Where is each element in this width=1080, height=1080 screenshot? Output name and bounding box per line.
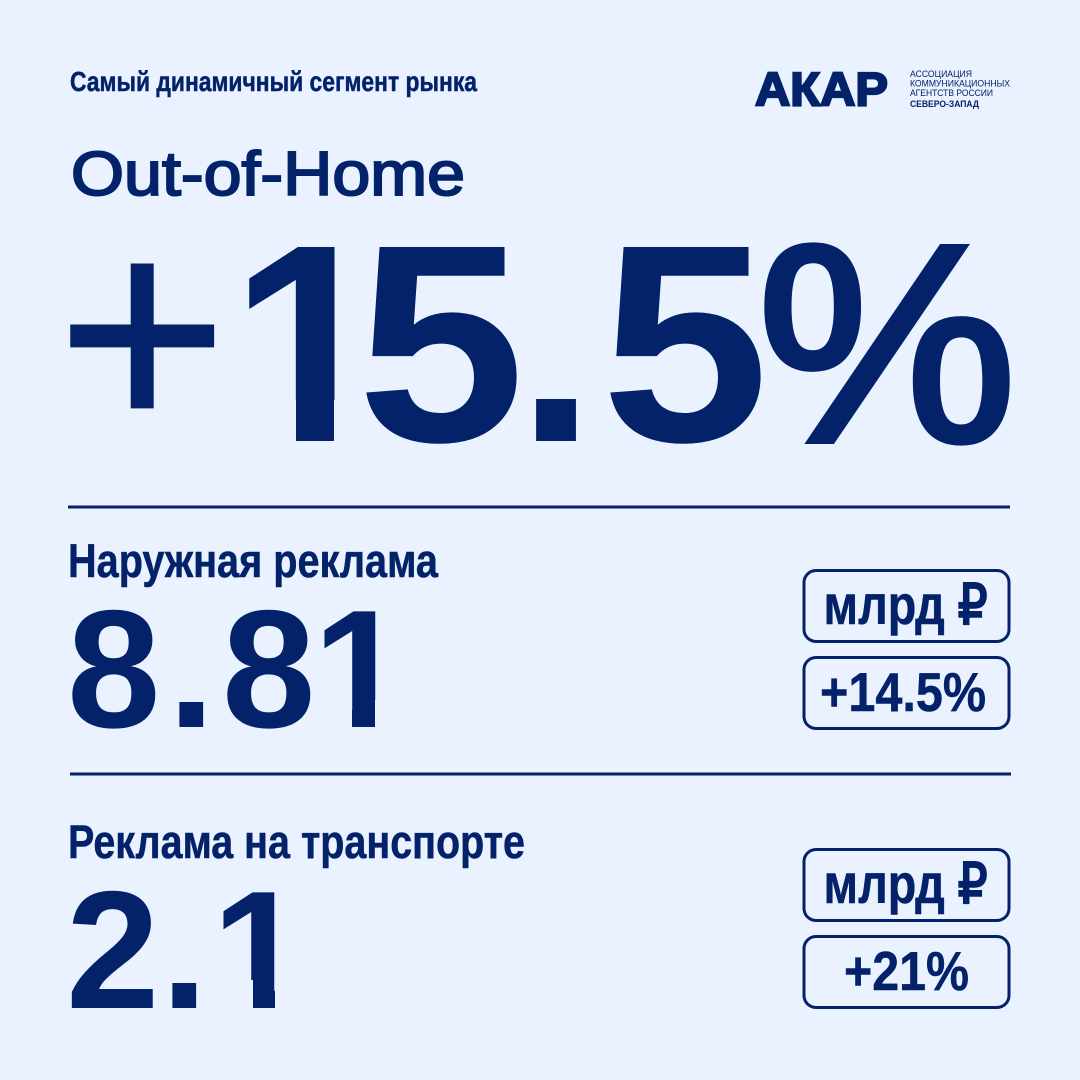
transport growth badge: +21% — [844, 940, 969, 1002]
outdoor unit badge: млрд ₽ — [824, 573, 988, 636]
header caption: Самый динамичный сегмент рынка — [70, 66, 477, 97]
main growth figure: . — [517, 186, 595, 501]
logo wordmark: АКАР — [755, 62, 888, 116]
outdoor heading: Наружная реклама — [68, 534, 439, 587]
outdoor value: 1 — [313, 575, 406, 763]
main growth figure: 5 — [357, 186, 525, 501]
divider — [68, 506, 1010, 508]
panel: transport advertising — [70, 825, 1010, 1009]
panel: outdoor advertising — [70, 544, 1010, 730]
main growth figure: 5 — [601, 186, 769, 501]
main growth figure: + — [57, 169, 228, 495]
logo descriptor: КОММУНИКАЦИОННЫХ — [910, 78, 1011, 88]
main growth figure — [70, 242, 1010, 446]
logo descriptor — [910, 68, 1011, 109]
outdoor value: 8 — [222, 575, 315, 763]
outdoor value — [72, 610, 376, 729]
logo descriptor: СЕВЕРО-ЗАПАД — [910, 98, 979, 109]
main growth figure: 1 — [230, 186, 387, 501]
transport value: . — [161, 856, 208, 1044]
outdoor value: 8 — [67, 575, 160, 763]
outdoor value: . — [168, 575, 215, 763]
transport unit badge: млрд ₽ — [824, 852, 988, 915]
outdoor growth badge: +14.5% — [820, 661, 986, 723]
transport heading: Реклама на транспорте — [68, 815, 525, 868]
main growth figure: % — [757, 186, 1017, 501]
logo descriptor: АГЕНТСТВ РОССИИ — [910, 87, 993, 98]
transport value: 2 — [66, 856, 159, 1044]
logo descriptor: АССОЦИАЦИЯ — [910, 68, 972, 79]
transport value: 1 — [212, 856, 305, 1044]
divider — [70, 772, 1011, 776]
logo: AKAR North-West — [755, 62, 1011, 116]
subject heading: Out-of-Home — [71, 140, 465, 209]
transport growth badge — [804, 936, 1009, 1008]
transport value — [72, 890, 275, 1008]
